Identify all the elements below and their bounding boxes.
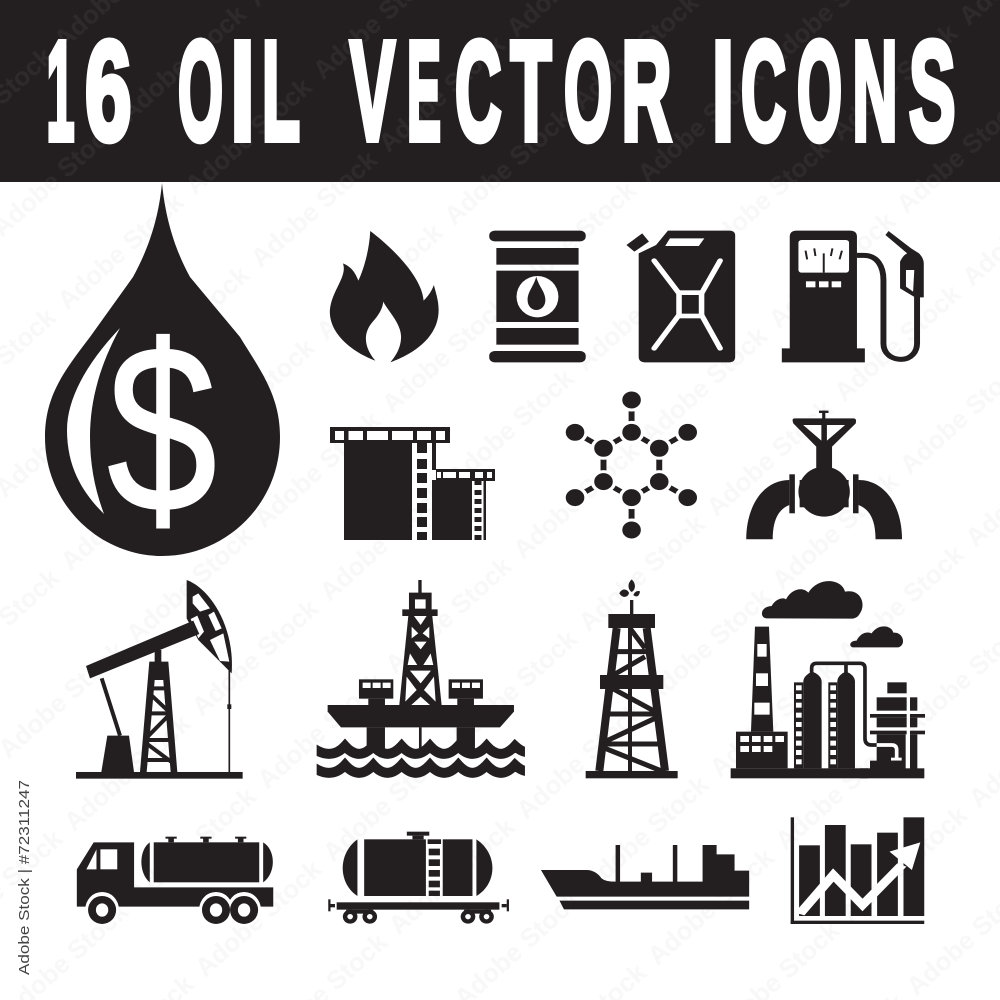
icon: oil drop with dollar (45, 183, 280, 562)
icon: refinery process unit (860, 682, 925, 778)
title: I (712, 12, 734, 170)
icon: oil drop with dollar: $ (107, 297, 217, 562)
icon row 1: flame, barrel, canister, fuel pump, molecule, valve (330, 231, 924, 540)
title: I (230, 12, 254, 170)
icon: oil tanker ship (541, 845, 749, 909)
icon: pipeline valve (746, 411, 902, 539)
icon: oil derrick (586, 579, 678, 778)
title: N (852, 12, 898, 170)
icon: rail tank car (328, 832, 509, 924)
title: O (178, 12, 223, 170)
icon: fuel truck (77, 837, 273, 927)
icon: flame (330, 231, 439, 362)
icon row 3 left: pump jack and offshore platform (76, 580, 533, 779)
title: L (262, 12, 300, 170)
title: E (407, 12, 441, 170)
icon: storage tanks (330, 427, 495, 540)
icon row 3 right: derrick and refinery (586, 579, 903, 778)
icon: molecule (564, 390, 699, 540)
icon: growth chart (791, 817, 924, 924)
header band (0, 0, 1000, 182)
icon: refinery with clouds (731, 581, 903, 778)
icon row 4: truck, rail tanker, ship, chart (77, 817, 924, 927)
stock credit: Adobe Stock | #72311247 (16, 780, 33, 975)
title: O (564, 12, 612, 170)
icon: fuel pump (782, 231, 924, 362)
title: O (797, 12, 842, 170)
title: R (622, 12, 672, 170)
icon: oil barrel (489, 231, 586, 362)
icon: jerry can (626, 231, 735, 362)
title: V (350, 12, 395, 170)
title (46, 12, 956, 170)
title: 6 (85, 12, 132, 170)
icon: pump jack (76, 580, 243, 779)
title: C (455, 12, 502, 170)
title: 1 (46, 12, 74, 170)
title: T (510, 12, 552, 170)
icon: offshore platform (310, 580, 533, 773)
title: C (741, 12, 786, 170)
